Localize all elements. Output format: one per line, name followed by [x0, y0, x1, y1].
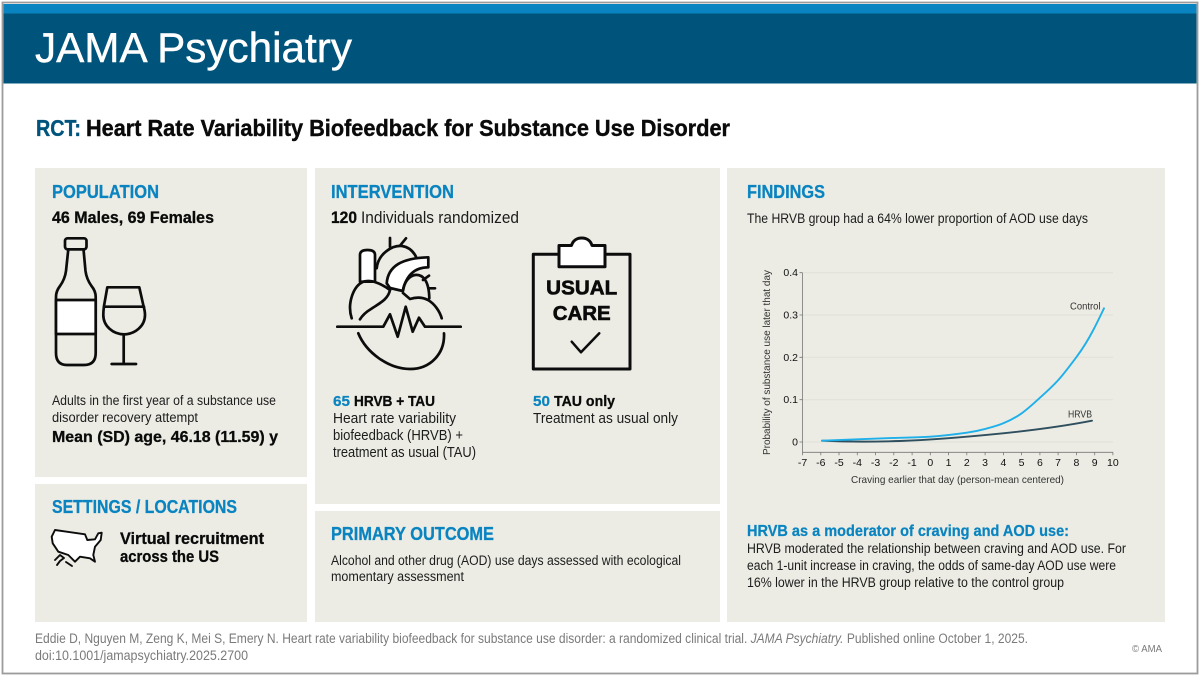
primary outcome text: momentary assessment: [331, 569, 464, 584]
panel: intervention: [315, 168, 720, 504]
primary outcome text: Alcohol and other drug (AOD) use days assessed with ecological: [331, 553, 681, 568]
icon: bottle and wine glass: [56, 238, 145, 365]
TAU only arm: 50: [533, 393, 550, 410]
line chart: probability of substance use by craving: Probability of substance use later that day: [761, 269, 773, 455]
TAU only arm: TAU only: [554, 393, 616, 410]
population heading: POPULATION: [52, 182, 159, 202]
participant counts: 46 Males, 69 Females: [52, 209, 214, 227]
line chart: probability of substance use by craving: HRVB: [1068, 409, 1092, 421]
moderator text: each 1-unit increase in craving, the odds of same-day AOD use were: [747, 558, 1116, 573]
population description: Adults in the first year of a substance use: [52, 393, 276, 408]
line chart: probability of substance use by craving: 6: [1037, 457, 1043, 469]
line chart: probability of substance use by craving: 0: [792, 436, 798, 448]
line chart: probability of substance use by craving: -5: [834, 457, 844, 469]
line chart: probability of substance use by craving: 8: [1073, 457, 1079, 469]
title: Heart Rate Variability Biofeedback for Substance Use Disorder: [86, 115, 730, 141]
line chart: probability of substance use by craving: 9: [1092, 457, 1098, 469]
primary outcome text: [331, 553, 681, 584]
line chart: probability of substance use by craving: 0.4: [783, 267, 798, 279]
icon: heart with ECG line: [337, 238, 461, 369]
line chart: probability of substance use by craving: 0.1: [783, 394, 798, 406]
panel: settings and locations: across the US: [120, 547, 219, 566]
TAU only arm: [533, 393, 679, 427]
citation: [35, 631, 1028, 663]
icon: US map: [52, 530, 102, 566]
line chart: probability of substance use by craving: 7: [1055, 457, 1061, 469]
line chart: probability of substance use by craving: 0.2: [783, 352, 798, 364]
panel: settings and locations: [35, 484, 307, 622]
line chart: probability of substance use by craving: 10: [1107, 457, 1119, 469]
settings text: Virtual recruitment: [120, 529, 264, 548]
panel: primary outcome: [315, 511, 720, 622]
TAU only arm: Treatment as usual only: [533, 411, 679, 427]
line chart: probability of substance use by craving: -4: [853, 457, 862, 469]
title: RCT:: [36, 115, 81, 141]
HRVB + TAU arm: [333, 393, 476, 461]
line chart: probability of substance use by craving: -7: [798, 457, 807, 469]
randomized count: Individuals randomized: [361, 209, 519, 227]
line chart: probability of substance use by craving: 0: [927, 457, 933, 469]
header banner: [4, 4, 1196, 84]
intervention heading: INTERVENTION: [331, 182, 454, 202]
line chart: probability of substance use by craving: 5: [1019, 457, 1025, 469]
line chart: probability of substance use by craving: -2: [889, 457, 899, 469]
line chart: probability of substance use by craving: Control: [1070, 300, 1100, 312]
moderator text: 16% lower in the HRVB group relative to the control group: [747, 575, 1064, 590]
line chart: probability of substance use by craving: 2: [964, 457, 970, 469]
primary outcome heading: PRIMARY OUTCOME: [331, 524, 494, 544]
randomized count: 120: [331, 209, 357, 227]
HRVB + TAU arm: HRVB + TAU: [354, 393, 435, 410]
icon: usual care clipboard: [533, 238, 630, 369]
panel: population: [35, 168, 307, 477]
findings summary: The HRVB group had a 64% lower proportion of AOD use days: [747, 211, 1088, 226]
HRVB + TAU arm: treatment as usual (TAU): [333, 445, 476, 461]
icon: usual care clipboard: CARE: [553, 302, 611, 325]
line chart: probability of substance use by craving: -6: [816, 457, 826, 469]
line chart: probability of substance use by craving: -3: [871, 457, 880, 469]
line chart: probability of substance use by craving: [761, 267, 1119, 486]
HRVB + TAU arm: 65: [333, 393, 350, 410]
findings heading: FINDINGS: [747, 182, 825, 202]
mean age: Mean (SD) age, 46.18 (11.59) y: [52, 429, 278, 446]
citation: Eddie D, Nguyen M, Zeng K, Mei S, Emery N. Heart rate variability biofeedback for substance use disorder: a randomized clinical trial. JAMA Psychiatry. Published online October 1, 2025.: [35, 631, 1028, 646]
line chart: probability of substance use by craving: -1: [907, 457, 917, 469]
panel: findings: [727, 168, 1165, 622]
line chart: probability of substance use by craving: 0.3: [783, 310, 798, 322]
panel: population: disorder recovery attempt: [52, 410, 198, 425]
line chart: probability of substance use by craving: Craving earlier that day (person-mean centered): [851, 474, 1064, 486]
copyright: © AMA: [1132, 644, 1162, 655]
journal name: JAMA Psychiatry: [35, 24, 352, 71]
moderator text: [747, 541, 1126, 590]
settings heading: SETTINGS / LOCATIONS: [52, 497, 237, 517]
moderator heading: HRVB as a moderator of craving and AOD use:: [747, 523, 1069, 540]
icon: usual care clipboard: USUAL: [546, 276, 617, 300]
line chart: probability of substance use by craving: 3: [982, 457, 988, 469]
HRVB + TAU arm: biofeedback (HRVB) +: [333, 428, 463, 444]
HRVB + TAU arm: Heart rate variability: [333, 411, 457, 427]
citation: doi:10.1001/jamapsychiatry.2025.2700: [35, 648, 248, 663]
line chart: probability of substance use by craving: 1: [946, 457, 952, 469]
moderator text: HRVB moderated the relationship between craving and AOD use. For: [747, 541, 1126, 556]
line chart: probability of substance use by craving: 4: [1000, 457, 1006, 469]
